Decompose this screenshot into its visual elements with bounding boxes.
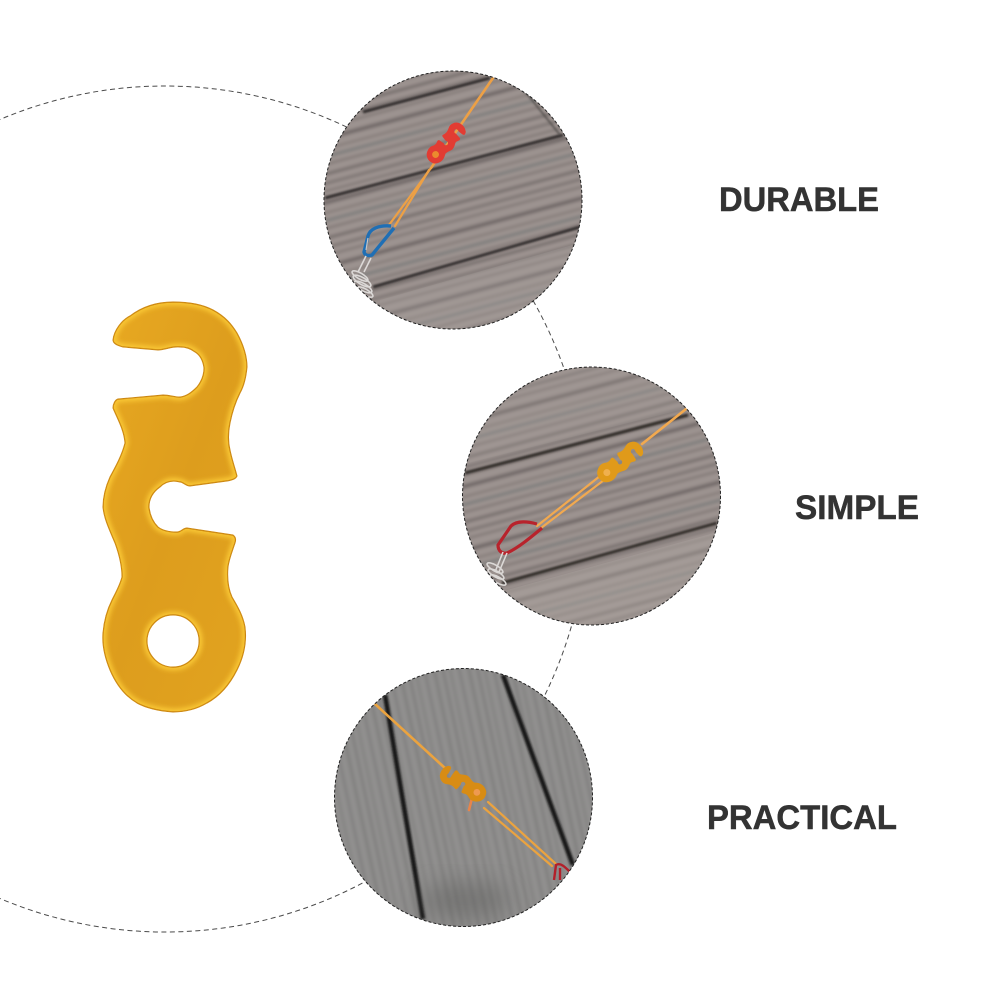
rope <box>389 78 493 226</box>
red hook <box>426 122 466 164</box>
orange hook <box>440 766 486 802</box>
label: practical: PRACTICAL <box>707 799 897 837</box>
dashed connector ring <box>0 86 588 932</box>
blue carabiner <box>364 226 394 256</box>
red carabiner <box>554 864 572 880</box>
photo: durable <box>324 70 582 330</box>
red carabiner <box>498 522 542 553</box>
product: gold tent rope hook <box>102 302 248 712</box>
wood deck <box>462 367 720 625</box>
spring <box>351 256 374 299</box>
label: simple: SIMPLE <box>795 489 919 527</box>
wood deck <box>324 71 582 329</box>
rope <box>537 409 686 528</box>
gold hook <box>597 442 644 482</box>
wood deck <box>334 668 592 926</box>
rope <box>375 704 556 866</box>
spring <box>486 552 507 587</box>
label: durable: DURABLE <box>719 181 879 219</box>
infographic canvas <box>0 70 918 932</box>
photo: practical <box>334 668 593 927</box>
photo: simple <box>462 366 721 626</box>
